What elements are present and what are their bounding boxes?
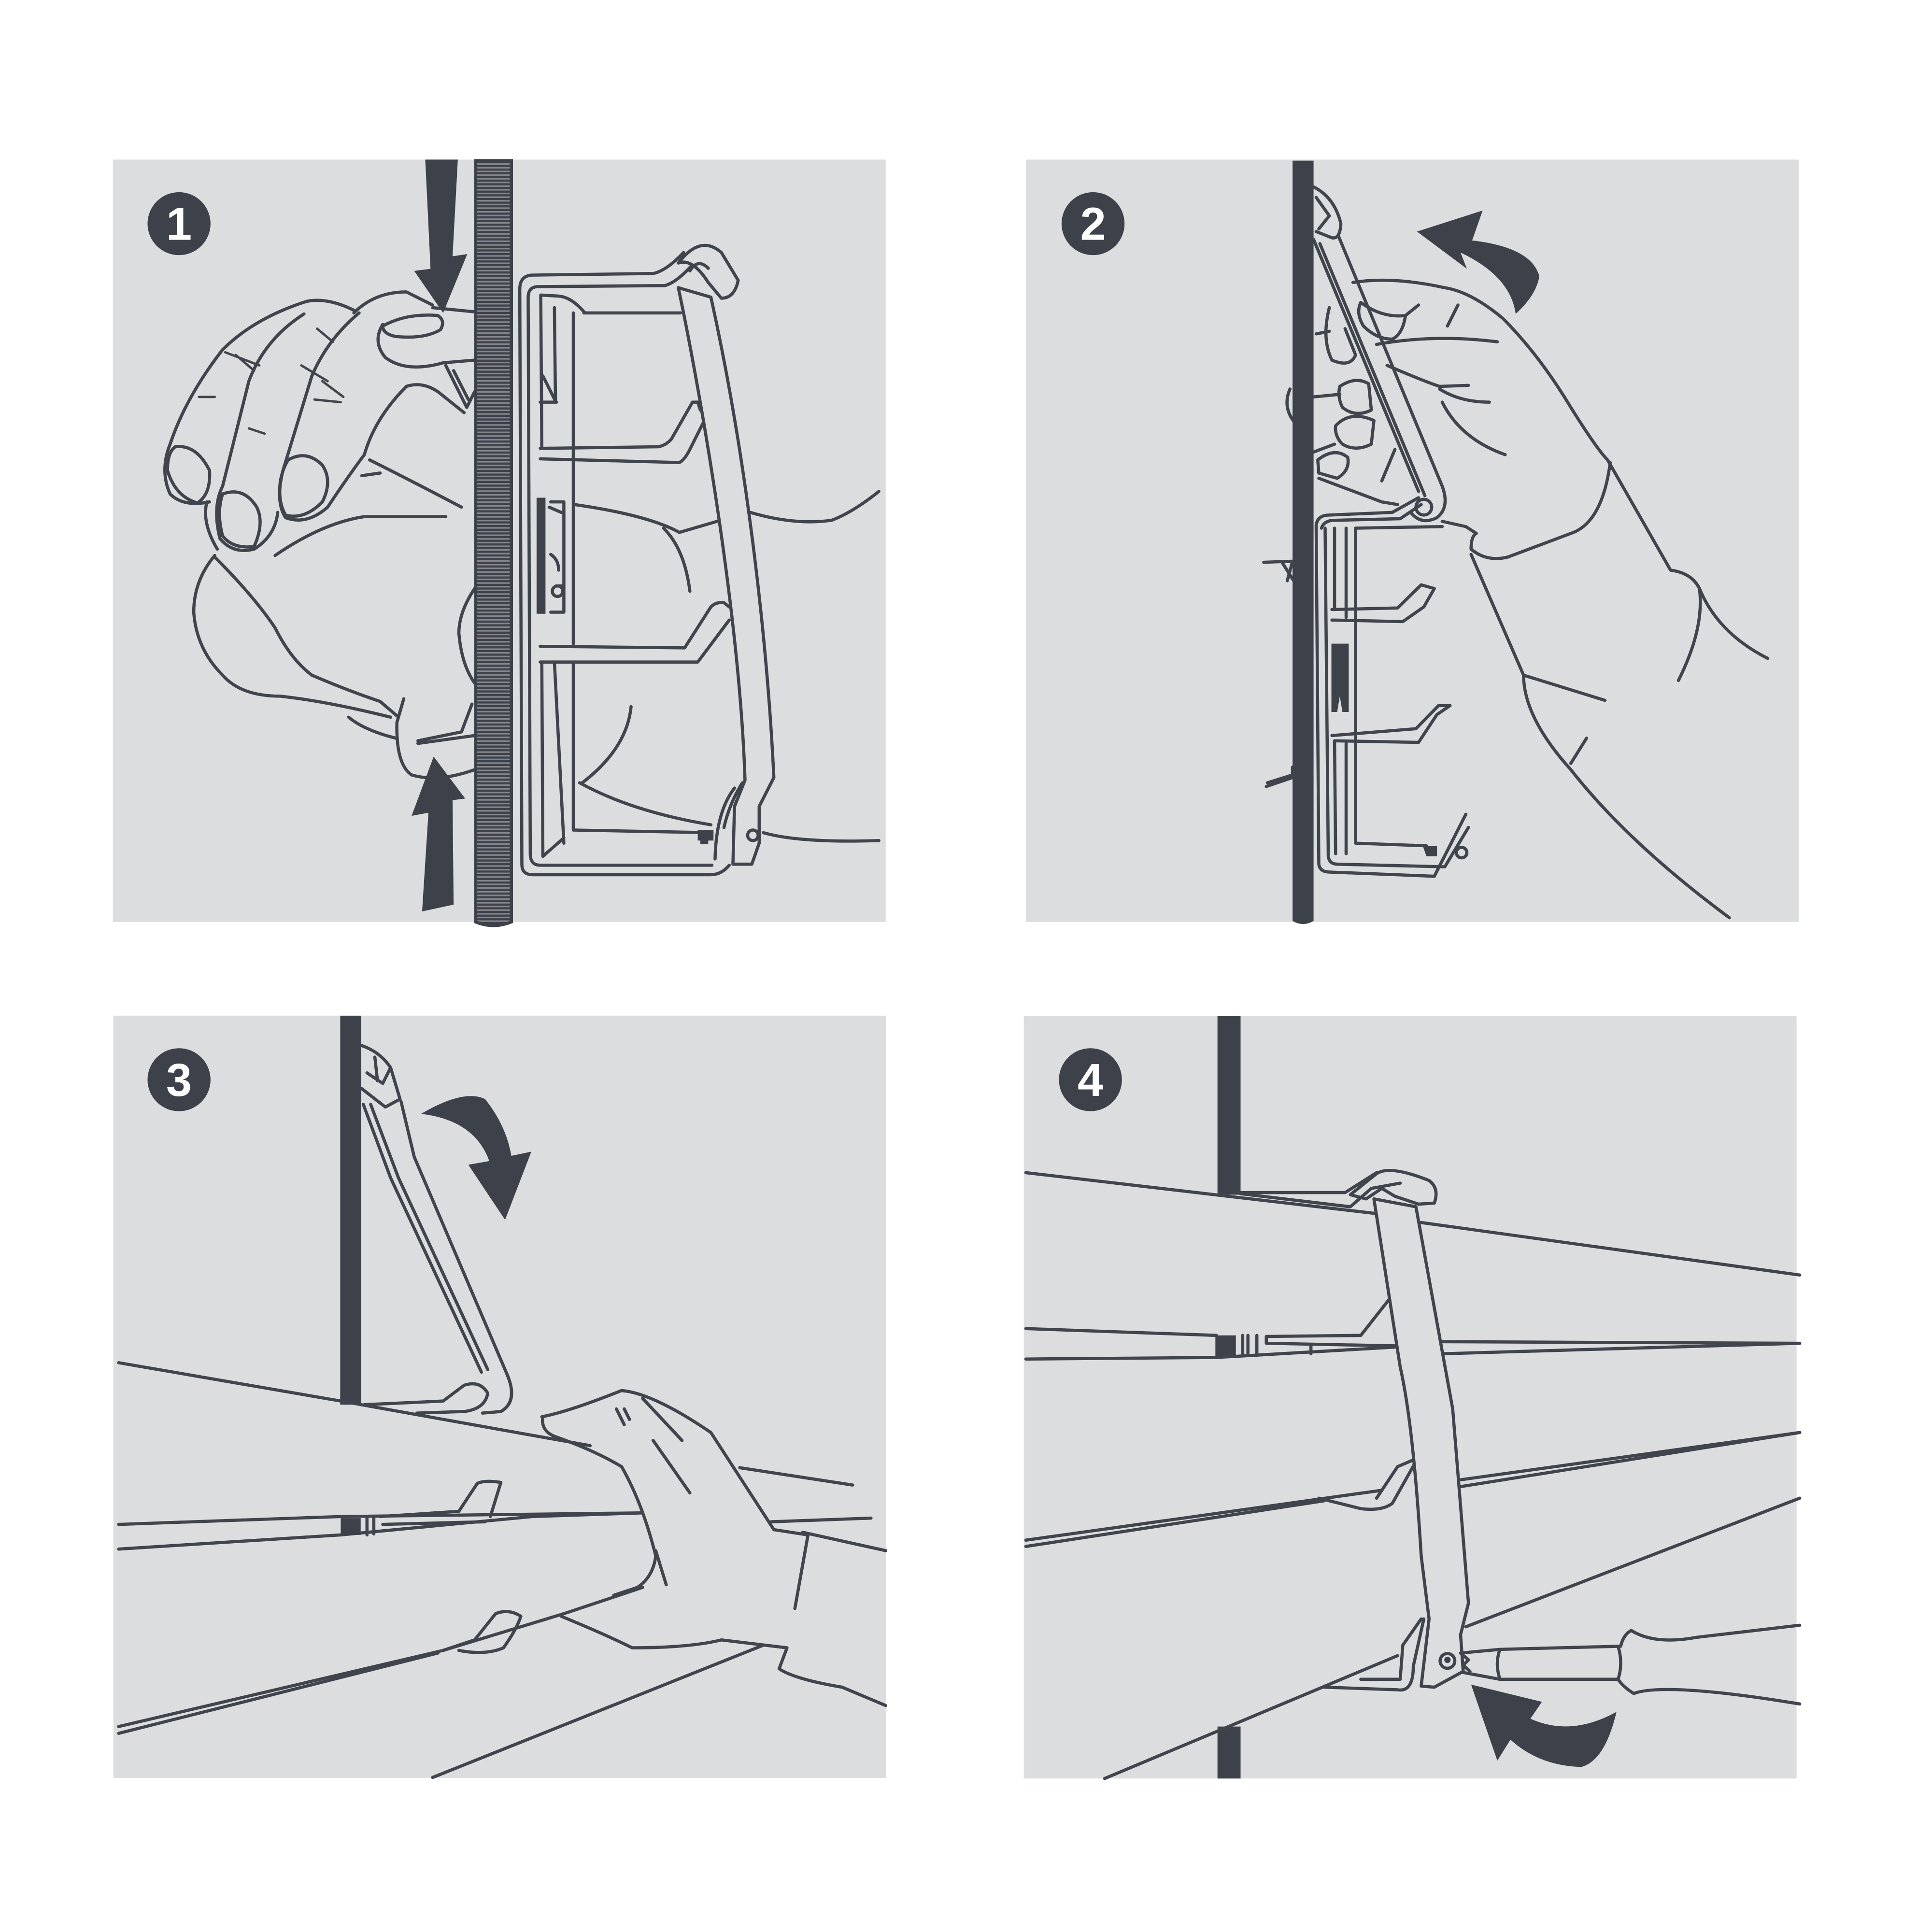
step badge 4 bbox=[1059, 1048, 1122, 1111]
arrow down bbox=[414, 159, 467, 313]
step badge 1: 1 bbox=[166, 199, 192, 250]
step badge 3: 3 bbox=[166, 1054, 192, 1106]
hand lifting strap bbox=[1287, 280, 1768, 918]
threaded rod bbox=[1293, 161, 1314, 924]
hand holding clip bbox=[165, 292, 879, 841]
strap and hook bbox=[678, 245, 774, 864]
strap bbox=[1240, 1170, 1468, 1687]
clip hanging open bbox=[1264, 497, 1468, 876]
panel 3: swing strap down bbox=[114, 1016, 886, 1778]
step badge 4: 4 bbox=[1078, 1054, 1103, 1106]
strap bbox=[362, 1046, 511, 1413]
arrow curved left bbox=[1471, 1685, 1617, 1767]
arrow curved down bbox=[421, 1096, 531, 1220]
step badge 1 bbox=[147, 192, 211, 255]
rod bbox=[340, 1016, 361, 1405]
panel 2: lift strap bbox=[1026, 159, 1799, 924]
boards bbox=[1026, 1173, 1800, 1778]
arrow up bbox=[412, 756, 465, 911]
step badge 2 bbox=[1062, 192, 1124, 255]
boards bbox=[119, 1363, 886, 1777]
strap raised bbox=[1314, 187, 1445, 521]
rod segments bbox=[1215, 1016, 1240, 1778]
step badge 2: 2 bbox=[1080, 199, 1106, 250]
hand on board bbox=[542, 1391, 886, 1705]
screwdriver bbox=[1440, 1625, 1800, 1704]
panel 1: squeeze clip onto threaded rod bbox=[113, 159, 886, 925]
clip bracket bbox=[520, 253, 742, 875]
step badge 3 bbox=[147, 1048, 211, 1111]
threaded rod bbox=[476, 161, 511, 925]
arrow curved up-left bbox=[1417, 211, 1539, 314]
panel 4: tighten screw bbox=[1024, 1016, 1800, 1778]
